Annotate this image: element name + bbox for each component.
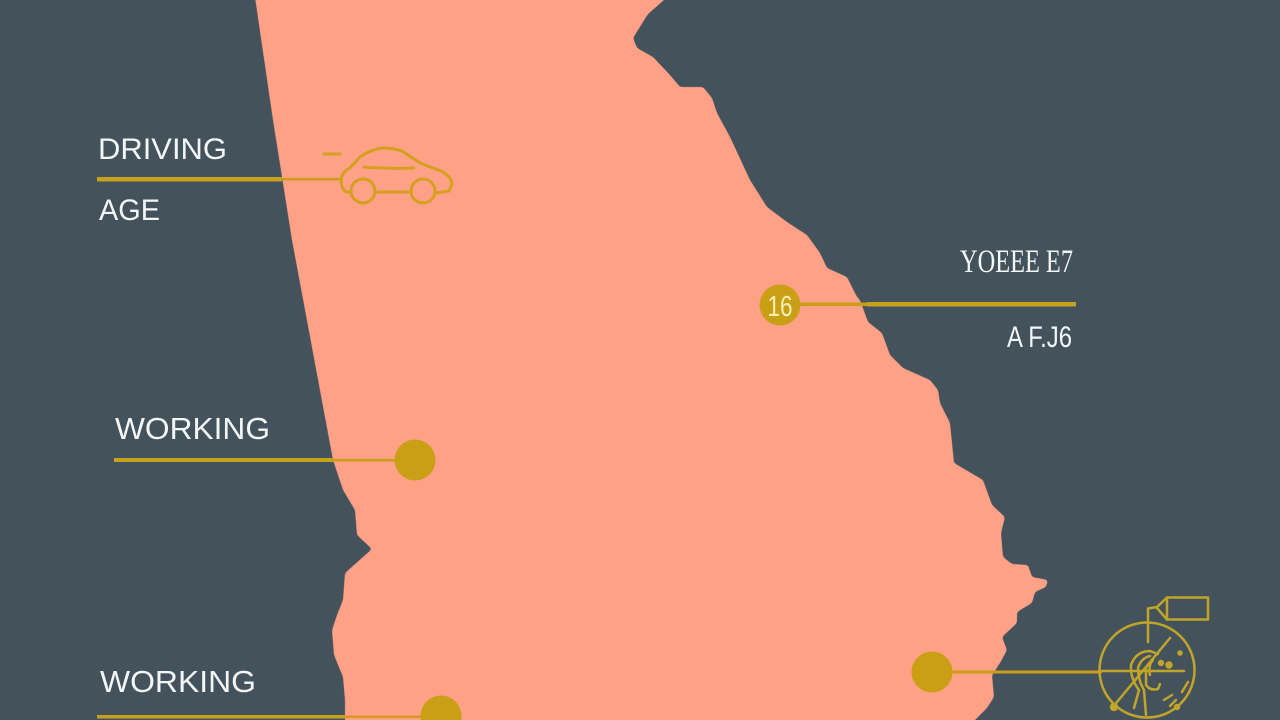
heading: garbled top label: YOEEE E7 — [960, 244, 1073, 280]
label: garbled lower label: A F.J6 — [1007, 321, 1072, 354]
heading: working lower: WORKING — [100, 664, 256, 699]
label: age: AGE — [99, 194, 160, 227]
callout: working lower — [97, 664, 462, 720]
marker: working lower — [420, 696, 462, 720]
map silhouette — [251, 0, 1048, 720]
connector line: driving age — [97, 177, 342, 182]
icon: car — [324, 148, 452, 203]
marker: lower right — [912, 652, 952, 692]
connector line: working upper — [114, 458, 400, 462]
marker: 16 — [760, 284, 800, 326]
marker: working upper — [394, 440, 436, 480]
connector line: age 16 — [795, 302, 1076, 306]
callout: lower right — [912, 598, 1208, 718]
heading: driving: DRIVING — [98, 133, 227, 166]
callout: age 16 — [760, 244, 1076, 354]
icon: hand in circle with tag — [1100, 598, 1208, 718]
connector line: working lower — [97, 715, 425, 718]
callout: driving age — [97, 133, 452, 227]
heading: working: WORKING — [115, 411, 270, 446]
callout: working upper — [114, 411, 436, 480]
connector line: lower right — [950, 670, 1102, 674]
marker: 16: 16 — [768, 291, 792, 323]
